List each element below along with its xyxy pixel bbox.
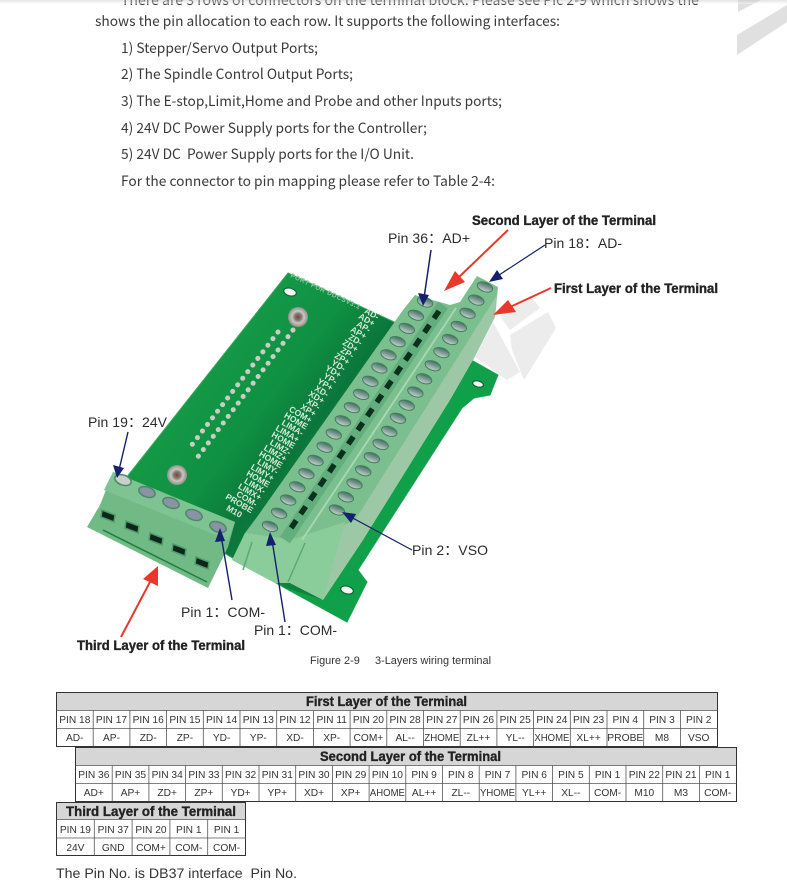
- first layer heading: First Layer of the Terminal: [306, 694, 467, 709]
- second layer pin numbers: PIN 36: [78, 770, 110, 781]
- second layer signals: COM-: [594, 788, 621, 799]
- block ridge: [302, 308, 456, 540]
- second layer pin numbers: PIN 1: [705, 770, 731, 781]
- second layer signals: XP+: [341, 788, 361, 799]
- first layer pin numbers: PIN 18: [59, 715, 91, 726]
- first layer signals: PROBE: [607, 733, 644, 744]
- arrow: third layer red: [121, 566, 158, 637]
- second layer pin numbers: PIN 5: [558, 770, 584, 781]
- first layer pin numbers: PIN 23: [573, 715, 605, 726]
- block lower front: [232, 522, 345, 600]
- first layer signals: ZL++: [467, 733, 490, 744]
- first layer pin numbers: PIN 28: [390, 715, 421, 726]
- label: Pin 36: Pin 36：AD+: [388, 230, 470, 246]
- first layer pin numbers: PIN 14: [206, 715, 238, 726]
- second layer signals: ZL--: [451, 788, 470, 799]
- label: Pin 18: Pin 18：AD-: [544, 235, 622, 251]
- PCB silkscreen labels: LIMA-: [280, 417, 306, 438]
- first layer pin numbers: PIN 24: [536, 715, 568, 726]
- third layer pin numbers: PIN 37: [98, 825, 129, 836]
- second layer pin numbers: PIN 10: [372, 770, 403, 781]
- second layer pin numbers: PIN 6: [521, 770, 547, 781]
- second layer screws: [261, 295, 434, 533]
- PCB silkscreen labels: YD-: [330, 357, 348, 373]
- arrow: Pin 1 second layer: [266, 532, 285, 622]
- third layer pin numbers: PIN 1: [214, 825, 240, 836]
- PCB silkscreen labels: XD-: [313, 383, 331, 399]
- first layer signals: YL--: [506, 733, 525, 744]
- first layer pin numbers: PIN 27: [426, 715, 458, 726]
- first layer pin numbers: PIN 16: [133, 715, 164, 726]
- second layer signals: AP+: [121, 788, 140, 799]
- arrow: second layer red: [444, 230, 508, 291]
- watermark: top-right stripes: [737, 0, 787, 55]
- watermark: centre logo: [475, 296, 556, 380]
- second layer signals: AD+: [84, 788, 104, 799]
- third layer signals: COM-: [213, 843, 240, 854]
- block groove: [285, 305, 443, 540]
- PCB silkscreen labels: LIMY-: [256, 457, 280, 477]
- second layer pin numbers: PIN 9: [411, 770, 437, 781]
- label: Second Layer: Second Layer of the Terminal: [472, 213, 656, 228]
- body text block: [95, 0, 699, 191]
- arrow: Pin 2: [342, 512, 412, 550]
- PCB header text: PORT FOR DDCSV3.1: [289, 272, 361, 311]
- PCB silkscreen labels: HOME: [245, 468, 272, 490]
- first layer signals: XHOME: [534, 733, 570, 744]
- PCB silkscreen labels: ZP-: [339, 345, 356, 361]
- label: Pin 1 third layer: Pin 1：COM-: [181, 604, 265, 620]
- PCB silkscreen labels: LIMZ+: [262, 443, 289, 464]
- PCB silkscreen labels: YD+: [324, 363, 343, 380]
- green terminal block: first and second layers: [232, 276, 498, 600]
- body text block: 2) The Spindle Control Output Ports;: [121, 64, 353, 84]
- second layer pin numbers: PIN 34: [152, 770, 183, 781]
- third layer pin numbers: PIN 19: [60, 825, 91, 836]
- second layer pin numbers: PIN 1: [595, 770, 621, 781]
- first layer pin numbers: PIN 15: [169, 715, 201, 726]
- first layer pin numbers: [59, 715, 712, 726]
- first layer signals: AL--: [395, 733, 415, 744]
- second layer pin numbers: PIN 31: [262, 770, 293, 781]
- PCB silkscreen labels: PROBE: [224, 491, 255, 515]
- second layer pin numbers: PIN 30: [298, 770, 330, 781]
- PCB silkscreen labels: XP+: [299, 402, 318, 419]
- first layer signals: ZD-: [140, 733, 157, 744]
- solder pins: [188, 330, 293, 458]
- first layer signals: VSO: [688, 733, 710, 744]
- body text block: 4) 24V DC Power Supply ports for the Controller;: [121, 118, 427, 138]
- second layer signals: YD+: [231, 788, 251, 799]
- first layer signals: YP-: [250, 733, 267, 744]
- second layer pin numbers: PIN 7: [485, 770, 511, 781]
- second layer pin numbers: PIN 22: [629, 770, 660, 781]
- second layer pin numbers: PIN 33: [188, 770, 220, 781]
- PCB silkscreen labels: M10: [225, 503, 244, 520]
- footnote: The Pin No. is DB37 interface Pin No.: [56, 865, 297, 881]
- arrow: Pin 19: [113, 432, 128, 478]
- third layer signals: 24V: [66, 843, 85, 854]
- body text block: 5) 24V DC Power Supply ports for the I/O Unit.: [121, 144, 414, 164]
- label: Pin 1 second layer: Pin 1：COM-: [254, 622, 337, 638]
- first layer pin numbers: PIN 17: [96, 715, 127, 726]
- table: third layer: [56, 802, 246, 856]
- third layer screws: [113, 472, 228, 535]
- table: first layer: [56, 692, 718, 746]
- first layer signals: XL++: [576, 733, 601, 744]
- third layer pin numbers: [60, 825, 240, 836]
- table: second layer: [76, 748, 736, 802]
- first layer signals: ZHOME: [424, 733, 459, 744]
- first layer pin numbers: PIN 26: [463, 715, 494, 726]
- label: First Layer: First Layer of the Terminal: [554, 281, 718, 296]
- second layer signals: M10: [634, 788, 655, 799]
- terminal board photo: [87, 272, 498, 622]
- second layer signals: COM-: [704, 788, 731, 799]
- first layer pin numbers: PIN 25: [500, 715, 531, 726]
- PCB silkscreen labels: ZD+: [341, 337, 360, 354]
- arrow: Pin 18: [489, 245, 545, 282]
- PCB silkscreen labels: HOME: [257, 449, 285, 470]
- PCB silkscreen labels: LIMA+: [274, 423, 301, 444]
- second layer signals: YP+: [268, 788, 287, 799]
- first layer signals: XP-: [323, 733, 340, 744]
- third layer wire openings: [101, 510, 209, 569]
- arrow: Pin 36: [418, 250, 431, 306]
- second layer heading: Second Layer of the Terminal: [320, 749, 501, 764]
- first layer signals: ZP-: [177, 733, 193, 744]
- first layer pin numbers: PIN 11: [317, 715, 347, 726]
- first layer pin numbers: PIN 20: [353, 715, 384, 726]
- arrow: first layer red: [493, 288, 551, 315]
- body text block: shows the pin allocation to each row. It supports the following interfaces:: [95, 11, 560, 31]
- second layer pin numbers: PIN 8: [448, 770, 474, 781]
- second layer signals: ZD+: [157, 788, 177, 799]
- PCB silkscreen labels: XD+: [307, 389, 326, 406]
- second layer pin numbers: PIN 21: [665, 770, 697, 781]
- top page shadow: [0, 0, 787, 4]
- second layer signals: XL--: [561, 788, 581, 799]
- PCB silkscreen labels: AP+: [349, 324, 368, 341]
- PCB silkscreen labels: AP-: [355, 319, 373, 335]
- label: Pin 2: Pin 2：VSO: [412, 542, 488, 558]
- PCB silkscreen labels: HOME: [283, 410, 310, 432]
- PCB silkscreen labels: COM+: [287, 404, 314, 425]
- third layer signals: COM+: [136, 843, 166, 854]
- arrow: Pin 1 third layer: [215, 528, 232, 600]
- PCB silkscreen labels: ZD-: [347, 332, 364, 348]
- figure caption: Figure 2-9 3-Layers wiring terminal: [310, 655, 491, 667]
- second layer signals: M3: [674, 788, 688, 799]
- second layer signals: YHOME: [480, 788, 515, 799]
- first layer signals: M8: [655, 733, 669, 744]
- PCB silkscreen labels: LIMY+: [249, 462, 276, 483]
- second layer signals: AHOME: [370, 788, 405, 799]
- third layer signals: GND: [102, 843, 125, 854]
- PCB silkscreen labels: AD-: [363, 306, 381, 322]
- third layer heading: Third Layer of the Terminal: [66, 804, 236, 819]
- second layer signals: [84, 788, 731, 799]
- PCB silkscreen labels: LIMX+: [237, 481, 263, 502]
- second layer pin numbers: PIN 29: [335, 770, 367, 781]
- PCB silkscreen labels: YP+: [316, 376, 335, 393]
- first layer signals: COM+: [354, 733, 383, 744]
- first layer signals: AD-: [66, 733, 84, 744]
- body text block: 1) Stepper/Servo Output Ports;: [121, 38, 318, 58]
- bright PCB tab and lower edge: [283, 361, 498, 622]
- block lower grooves: [243, 542, 305, 582]
- first layer signals: YD-: [213, 733, 230, 744]
- PCB silkscreen labels: LIMX-: [243, 476, 268, 496]
- first layer pin numbers: PIN 13: [243, 715, 274, 726]
- PCB silkscreen labels: AD+: [357, 311, 377, 328]
- third layer signals: [66, 843, 240, 854]
- first layer signals: XD-: [286, 733, 304, 744]
- block right face: [300, 295, 497, 600]
- second layer pin numbers: [78, 770, 731, 781]
- PCB silkscreen labels: [224, 306, 381, 520]
- first layer signals: [66, 733, 710, 744]
- PCB silkscreen labels: YP-: [322, 370, 339, 386]
- PCB silkscreen labels: XP-: [305, 396, 322, 412]
- second layer pin numbers: PIN 32: [225, 770, 257, 781]
- third layer pin numbers: PIN 20: [135, 825, 167, 836]
- mounting holes: [283, 287, 484, 595]
- second layer signals: YL++: [522, 788, 546, 799]
- first layer pin numbers: PIN 2: [686, 715, 712, 726]
- terminal slots: [287, 311, 439, 534]
- second layer signals: ZP+: [194, 788, 213, 799]
- second layer signals: XD+: [304, 788, 324, 799]
- first layer pin numbers: PIN 4: [613, 715, 638, 726]
- label: Third Layer: Third Layer of the Terminal: [77, 638, 245, 653]
- PCB silkscreen labels: COM-: [235, 489, 259, 509]
- first layer pin numbers: PIN 12: [279, 715, 311, 726]
- green terminal block: third layer: [87, 472, 235, 588]
- body text block: 3) The E-stop,Limit,Home and Probe and other Inputs ports;: [121, 91, 502, 111]
- standoff screws: [167, 307, 308, 485]
- first layer pin numbers: PIN 3: [649, 715, 675, 726]
- second layer pin numbers: PIN 35: [115, 770, 146, 781]
- PCB silkscreen labels: LIMZ-: [268, 437, 293, 457]
- body text block: For the connector to pin mapping please refer to Table 2-4:: [121, 171, 495, 191]
- PCB silkscreen labels: ZP+: [333, 350, 352, 367]
- third layer signals: COM-: [175, 843, 202, 854]
- green PCB: [126, 273, 498, 622]
- first layer screws: [328, 280, 494, 517]
- first layer signals: AP-: [103, 733, 120, 744]
- second layer signals: AL++: [412, 788, 436, 799]
- PCB silkscreen labels: HOME: [270, 429, 297, 451]
- third layer pin numbers: PIN 1: [176, 825, 202, 836]
- label: Pin 19: Pin 19：24V: [88, 414, 168, 430]
